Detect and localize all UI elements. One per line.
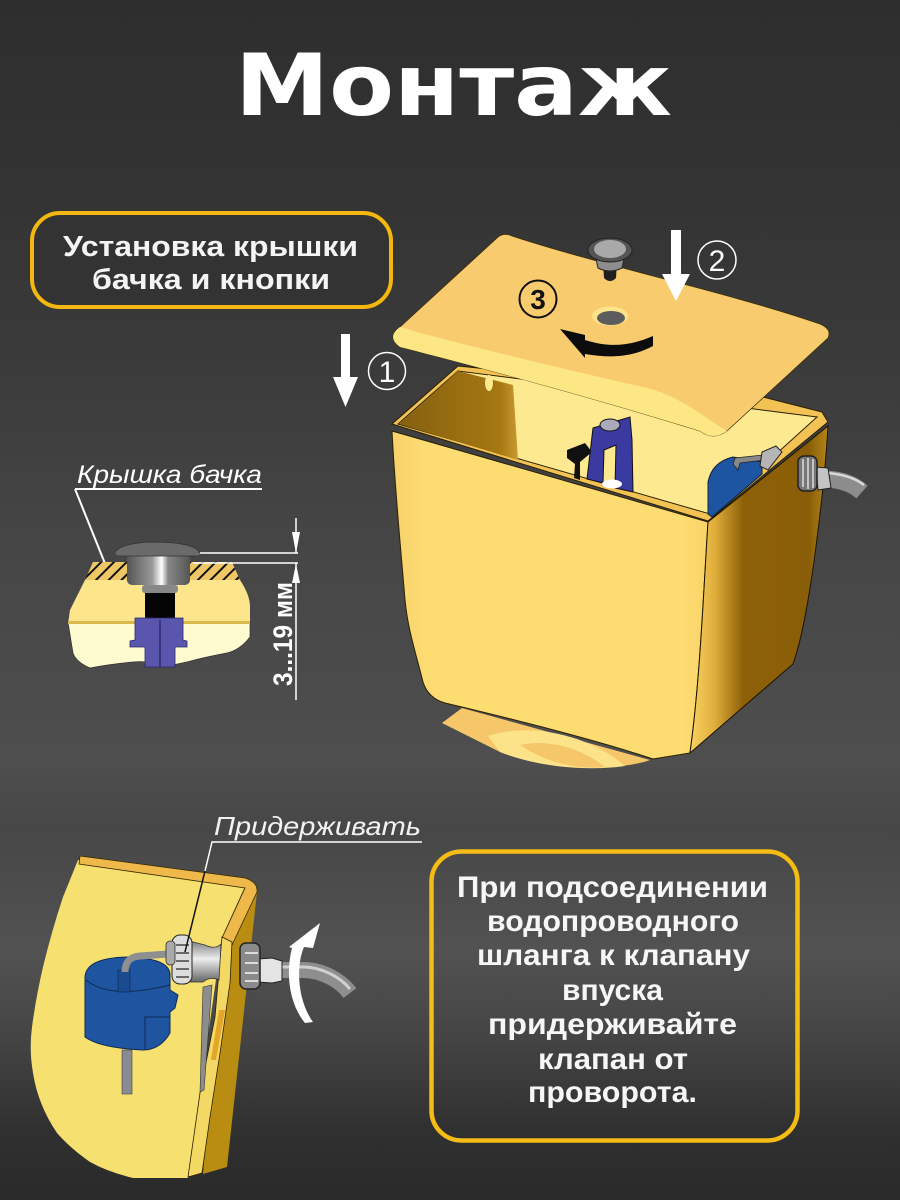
rotation arrow [289,923,320,1023]
blue valve stem [130,618,187,667]
lower cream cavity [68,622,250,668]
dimension 3...19 mm: 3...19 мм [268,582,298,686]
outlet nut and hose [240,943,350,993]
callout: lid and button installation: бачка и кнопки [92,264,330,296]
label: tank lid: Крышка бачка [77,461,262,489]
arrow: step 2 [662,230,736,301]
float in tank [708,446,782,517]
callout: hold the valve while connecting the hose: шланга к клапану [477,939,751,972]
cross-section diagram [68,542,250,668]
button in section [115,542,200,619]
tank lid [393,234,829,436]
toilet seat base [442,708,650,768]
tank rim and interior [392,366,828,521]
arrow: step 1 [333,334,406,407]
hatched lid section [85,562,240,580]
callout: lid and button installation: Установка крышки [63,231,358,263]
cistern illustration [392,230,864,768]
dark tank side [203,884,257,1174]
callout: hold the valve while connecting the hose: придерживайте [488,1008,737,1041]
blue float [85,957,178,1050]
yellow tank wall [31,860,247,1178]
yellow wall [68,580,250,624]
label: hold [185,811,422,952]
marker: step 3 [520,280,556,318]
rotation arrow [560,329,653,358]
callout: hold the valve while connecting the hose [432,852,798,1140]
float rod [122,1050,132,1094]
label: hold: Придерживать [214,811,421,841]
inlet valve [166,935,221,984]
lid hole [592,306,628,326]
dimension 3...19 mm [193,518,300,700]
rim and section strip [79,856,257,1177]
float arm [125,954,168,972]
label: tank lid [75,461,262,566]
cutaway tank illustration [31,811,422,1178]
marker: step 3: 3 [530,284,546,315]
tank side face [690,426,828,753]
water supply tube [200,985,212,1092]
callout: lid and button installation [32,213,391,307]
flush mechanism [567,417,633,492]
arrow: step 1: 1 [379,356,395,389]
callout: hold the valve while connecting the hose: впуска [562,974,664,1007]
callout: hold the valve while connecting the hose: При подсоединении [457,871,768,904]
title: Монтаж [235,36,672,136]
water hose connection [798,456,864,492]
callout: hold the valve while connecting the hose: клапан от [538,1043,688,1076]
tank front face [392,431,708,759]
callout: hold the valve while connecting the hose: проворота. [528,1076,697,1109]
arrow: step 2: 2 [709,245,725,278]
flush button [588,238,632,281]
callout: hold the valve while connecting the hose: водопроводного [487,905,739,938]
